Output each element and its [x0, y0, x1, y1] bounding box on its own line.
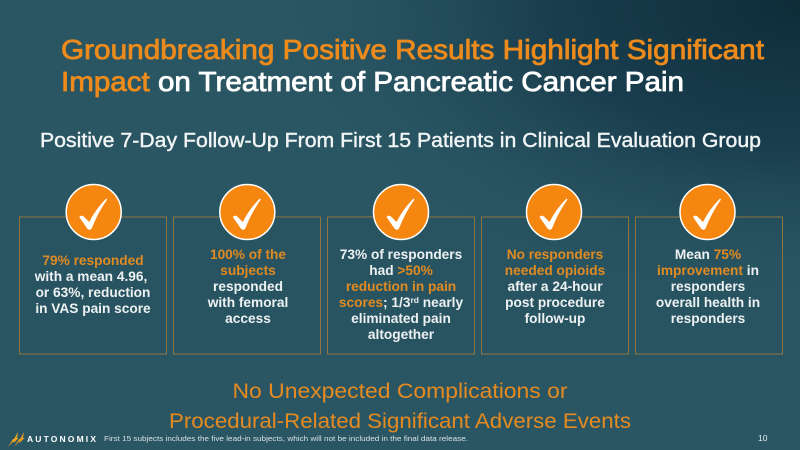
panel: mean 75% improvement: improvement in [657, 263, 759, 278]
panel: 100% of the subjects [174, 217, 320, 354]
icon: check 5 [680, 184, 735, 240]
panel: 73% of responders: rd [410, 295, 419, 305]
icon: check 2 [220, 184, 275, 240]
panel: 73% of responders: scores; 1/3 [339, 295, 410, 310]
panel: 79% responded: or 63%, reduction [36, 285, 150, 300]
panel: mean 75% improvement: responders [671, 311, 746, 326]
panel: 100% of the subjects: access [225, 311, 271, 326]
icon: check 4 [526, 184, 582, 240]
panel: 73% of responders: reduction in pain [346, 279, 456, 294]
logo: Autonomix [8, 432, 96, 447]
panel: no responders needed opioids: No responders [507, 247, 604, 262]
panel: no responders needed opioids [482, 217, 628, 354]
conclusion [169, 379, 631, 433]
panel: 79% responded: with a mean 4.96, [34, 269, 147, 284]
conclusion: No Unexpected Complications or [232, 379, 568, 403]
panel: 79% responded [20, 217, 166, 354]
panel: 100% of the subjects: subjects [220, 263, 276, 278]
logo: Autonomix: AUTONOMIX [27, 434, 96, 444]
panel: mean 75% improvement: responders [671, 279, 746, 294]
panel: no responders needed opioids: follow-up [525, 311, 585, 326]
panel: 73% of responders: eliminated pain [351, 311, 451, 326]
panel: 100% of the subjects: 100% of the [210, 247, 286, 262]
panel: mean 75% improvement: overall health in [656, 295, 760, 310]
panel: 73% of responders: 73% of responders [340, 247, 463, 262]
panel: 73% of responders: altogether [368, 327, 435, 342]
panel: 100% of the subjects: with femoral [207, 295, 288, 310]
panel: 79% responded: 79% responded [42, 253, 144, 268]
title [61, 34, 764, 97]
conclusion: Procedural-Related Significant Adverse Events [169, 409, 631, 433]
page number: 10 [758, 433, 768, 443]
panel: 79% responded: in VAS pain score [35, 301, 151, 316]
title: Impact on Treatment of Pancreatic Cancer Pain [61, 66, 684, 97]
panel: 73% of responders [328, 217, 474, 354]
panel: 73% of responders: nearly [419, 295, 463, 310]
title: Groundbreaking Positive Results Highlight Significant [61, 34, 764, 65]
icon: check 3 [374, 184, 428, 240]
panel: no responders needed opioids: needed opioids [505, 263, 606, 278]
icon: check 1 [66, 184, 121, 240]
footnote: First 15 subjects includes the five lead-in subjects, which will not be included in the final data release. [104, 434, 468, 443]
panel: 100% of the subjects: responded [213, 279, 283, 294]
panel: mean 75% improvement: Mean 75% [675, 247, 741, 262]
panel: 73% of responders: had >50% [369, 263, 433, 278]
panel: no responders needed opioids: post procedure [505, 295, 605, 310]
panel: mean 75% improvement [636, 217, 782, 354]
panel: no responders needed opioids: after a 24-hour [507, 279, 603, 294]
subtitle: Positive 7-Day Follow-Up From First 15 Patients in Clinical Evaluation Group [40, 130, 761, 152]
